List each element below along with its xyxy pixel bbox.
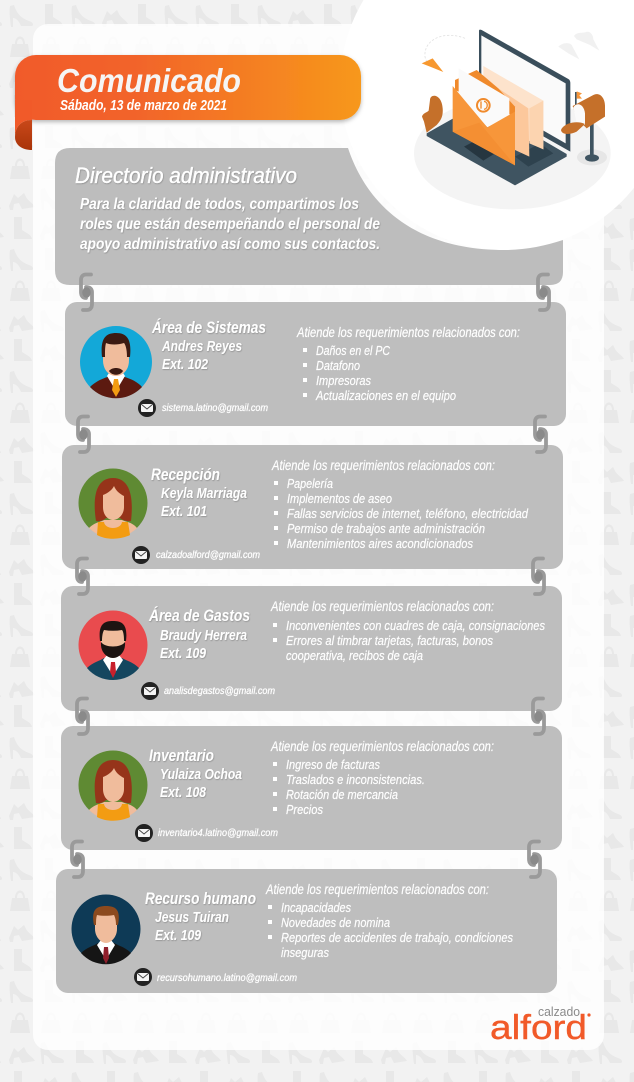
contact name: Ext. 109 [155, 927, 202, 944]
intro text: Para la claridad de todos, compartimos los [80, 196, 359, 213]
plant [422, 96, 443, 133]
requirements list: Fallas servicios de internet, teléfono, electricidad [287, 506, 529, 521]
heading: directorio: Directorio administrativo [75, 163, 297, 188]
email: analisdegastos@gmail.com [164, 686, 275, 697]
requirements list: Actualizaciones en el equipo [315, 388, 456, 403]
requirements list: Reportes de accidentes de trabajo, condiciones [281, 930, 513, 945]
avatar: mujer [78, 468, 148, 539]
requirements list: Errores al timbrar tarjetas, facturas, bonos [286, 633, 493, 648]
date: Sábado, 13 de marzo de 2021 [60, 98, 227, 114]
white circle behind illustration [340, 0, 634, 250]
intro text: roles que están desempeñando el personal de [80, 216, 380, 233]
logo: calzado alford: alford [490, 1009, 587, 1047]
contact name [161, 485, 247, 520]
title banner [15, 55, 361, 150]
requirements list: Rotación de mercancia [286, 787, 398, 802]
laptop base [427, 103, 567, 185]
contact name: Andres Reyes [161, 338, 242, 355]
email [134, 968, 297, 986]
requirements list: Atiende los requerimientos relacionados con: [265, 882, 489, 897]
requirements list: Papelería [287, 476, 333, 491]
email [138, 399, 268, 417]
contact name: Ext. 102 [162, 356, 209, 373]
requirements list: Datafono [316, 358, 360, 373]
panel: introduction [55, 148, 563, 285]
contact name: Ext. 108 [160, 784, 207, 801]
title: Comunicado [57, 62, 241, 99]
email: recursohumano.latino@gmail.com [157, 973, 297, 984]
contact name: Braudy Herrera [160, 627, 247, 644]
avatar: hombre traje negro [72, 894, 140, 964]
email: inventario4.latino@gmail.com [158, 828, 278, 839]
card: Área de Sistemas [65, 302, 566, 426]
contact name [160, 627, 247, 662]
back envelopes [483, 66, 543, 149]
email: sistema.latino@gmail.com [162, 403, 268, 414]
requirements list: inseguras [281, 945, 329, 960]
requirements list: Inconvenientes con cuadres de caja, consignaciones [286, 618, 545, 633]
requirements list: Mantenimientos aires acondicionados [287, 536, 473, 551]
email [132, 546, 260, 564]
requirements list: Ingreso de facturas [286, 757, 380, 772]
requirements list: Novedades de nomina [281, 915, 390, 930]
requirements list: cooperativa, recibos de caja [286, 648, 423, 663]
contact name: Ext. 109 [160, 645, 207, 662]
requirements list: Impresoras [316, 373, 371, 388]
requirements list: Atiende los requerimientos relacionados con: [270, 739, 494, 754]
email: calzadoalford@gmail.com [156, 550, 260, 561]
card: Inventario [61, 726, 562, 850]
chain links [72, 274, 549, 877]
laptop screen [479, 30, 570, 152]
card: Recepción [62, 445, 563, 569]
paper plane [422, 58, 443, 72]
requirements list [271, 458, 529, 551]
contact name [160, 766, 242, 801]
contact name [161, 338, 242, 373]
contact name: Keyla Marriaga [161, 485, 247, 502]
illustration: laptop with envelopes and mailbox [414, 30, 611, 209]
requirements list: Precios [286, 802, 323, 817]
contact name: Ext. 101 [161, 503, 207, 520]
department name: Inventario [149, 747, 214, 765]
avatar: hombre traje azul [78, 610, 148, 680]
requirements list [270, 599, 545, 663]
contact name: Jesus Tuiran [155, 909, 229, 926]
banner curl [15, 120, 32, 150]
avatar: mujer [78, 750, 148, 821]
department name: Recepción [151, 466, 220, 484]
requirements list [270, 739, 494, 817]
requirements list: Atiende los requerimientos relacionados con: [270, 599, 494, 614]
email [141, 682, 275, 700]
department name: Recurso humano [145, 890, 256, 908]
contact name [155, 909, 229, 944]
intro text [80, 196, 380, 253]
card: Área de Gastos [61, 586, 562, 711]
requirements list [265, 882, 513, 960]
requirements list: Atiende los requerimientos relacionados con: [296, 325, 520, 340]
requirements list [296, 325, 520, 403]
department name: Área de Sistemas [151, 318, 266, 337]
requirements list: Implementos de aseo [287, 491, 392, 506]
front envelope [455, 70, 515, 117]
email [135, 824, 278, 842]
requirements list: Atiende los requerimientos relacionados con: [271, 458, 495, 473]
requirements list: Traslados e inconsistencias. [286, 772, 425, 787]
mailbox [577, 149, 607, 165]
requirements list: Daños en el PC [316, 343, 390, 358]
department name: Área de Gastos [148, 606, 250, 625]
logo: calzado alford: calzado [538, 1004, 580, 1019]
intro text: apoyo administrativo así como sus contactos. [80, 236, 380, 253]
contact name: Yulaiza Ochoa [160, 766, 242, 783]
card: Recurso humano [56, 869, 557, 993]
requirements list: Permiso de trabajos ante administración [287, 521, 485, 536]
requirements list: Incapacidades [281, 900, 351, 915]
avatar: hombre con barba [80, 326, 152, 398]
